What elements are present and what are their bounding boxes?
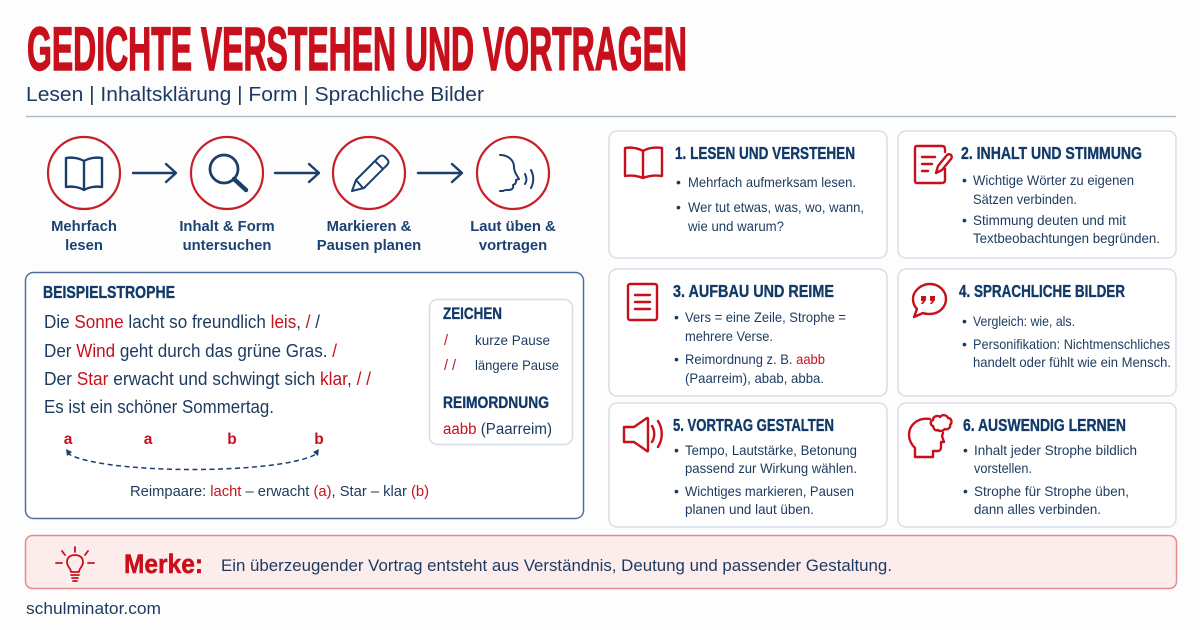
legend box: / [444,333,449,349]
panel: 6 Auswendig lernen: vorstellen. [974,460,1032,476]
panel: 3 Aufbau und Reime: 3. AUFBAU UND REIME [673,281,834,301]
panel: 5 Vortrag gestalten: Tempo, Lautstärke, Betonung [685,442,857,458]
rhyme letters: b [227,431,237,448]
step 3: mark and plan pauses [317,137,421,254]
panel: 4 Sprachliche Bilder: Vergleich: wie, als. [973,313,1075,329]
step 4: practise aloud [470,137,556,254]
panel: 4 Sprachliche Bilder: • [962,313,967,329]
panel: 3 Aufbau und Reime: (Paarreim), abab, abba. [685,370,824,386]
panel: 2 Inhalt und Stimmung: • [962,212,967,228]
panel: 2 Inhalt und Stimmung: • [962,172,967,188]
panel: 1 Lesen und Verstehen: wie und warum? [687,218,784,234]
step 4: practise aloud: vortragen [479,238,547,254]
legend box: / / [444,358,457,374]
legend box [430,300,572,444]
step 4: practise aloud: Laut üben & [470,219,556,235]
legend box: längere Pause [475,357,559,373]
rhyme letters [64,431,324,448]
panel: 2 Inhalt und Stimmung: Stimmung deuten und mit [973,212,1126,228]
panel: 5 Vortrag gestalten: passend zur Wirkung wählen. [685,460,857,476]
panel: 4 Sprachliche Bilder: handelt oder fühlt wie ein Mensch. [973,354,1171,370]
legend box: REIMORDNUNG [443,393,549,412]
panel: 6 Auswendig lernen: dann alles verbinden. [974,501,1101,517]
step 1: read repeatedly [48,137,120,254]
panel: 6 Auswendig lernen: • [963,442,968,458]
panel: 3 Aufbau und Reime: Reimordnung z. B. aabb [685,351,825,367]
panel: 5 Vortrag gestalten: 5. VORTRAG GESTALTEN [673,415,834,435]
panel: 1 Lesen und Verstehen: • [676,174,681,190]
panel: 5 Vortrag gestalten: • [674,483,679,499]
icon: document [628,284,657,320]
poem lines [44,312,371,417]
icon: speech bubble [913,284,946,317]
icon: speaker [624,418,662,451]
arrow 1 [133,164,176,182]
step 3: mark and plan pauses: Pausen planen [317,238,421,254]
icon: head with thought cloud [909,415,951,457]
panel: 3 Aufbau und Reime: • [674,351,679,367]
step 2: examine content and form [179,137,275,254]
panel: 3 Aufbau und Reime [609,269,887,396]
step 2: examine content and form: untersuchen [183,238,271,254]
panel: 2 Inhalt und Stimmung [898,131,1176,258]
step 3: mark and plan pauses: Markieren & [327,219,412,235]
panel: 5 Vortrag gestalten: Wichtiges markieren, Pausen [685,483,854,499]
panel: 3 Aufbau und Reime: • [674,309,679,325]
icon: book [625,148,662,178]
panel: 5 Vortrag gestalten: • [674,442,679,458]
poem lines: Der Wind geht durch das grüne Gras. / [44,341,337,361]
poem lines: Es ist ein schöner Sommertag. [44,397,274,417]
arrow 2 [275,164,319,182]
panel: 1 Lesen und Verstehen [609,131,887,258]
footer: schulminator.com [26,600,161,618]
rhyme pairs: Reimpaare: lacht – erwacht (a), Star – klar (b) [130,483,429,500]
dashed rhyme arc [66,449,319,470]
process flow [48,137,556,254]
panel: 4 Sprachliche Bilder: Personifikation: Nichtmenschliches [973,336,1170,352]
arrow 3 [418,164,462,182]
panel: 6 Auswendig lernen: Strophe für Strophe üben, [974,483,1129,499]
subtitle: Lesen | Inhaltsklärung | Form | Sprachliche Bilder [26,83,484,106]
legend box: kurze Pause [475,332,550,348]
legend box: aabb (Paarreim) [443,421,552,438]
panel: 3 Aufbau und Reime: Vers = eine Zeile, Strophe = [685,309,846,325]
rhyme letters: a [144,431,153,448]
panel: 1 Lesen und Verstehen: Mehrfach aufmerksam lesen. [688,174,856,190]
poem lines: Die Sonne lacht so freundlich leis, / / [44,312,320,332]
callout: Merke: Merke: [124,549,203,579]
panel: 2 Inhalt und Stimmung: Textbeobachtungen begründen. [973,230,1160,246]
panel: 6 Auswendig lernen: 6. AUSWENDIG LERNEN [963,415,1126,435]
panel: 6 Auswendig lernen: Inhalt jeder Strophe bildlich [974,442,1137,458]
heading: BEISPIELSTROPHE [43,282,175,302]
panel: 1 Lesen und Verstehen: 1. LESEN UND VERSTEHEN [675,143,855,163]
legend box: ZEICHEN [443,304,502,323]
panel: 4 Sprachliche Bilder [898,269,1176,396]
panel: 2 Inhalt und Stimmung: Wichtige Wörter zu eigenen [973,172,1134,188]
step 1: read repeatedly: Mehrfach [51,219,117,235]
panel: 4 Sprachliche Bilder: 4. SPRACHLICHE BILDER [959,281,1125,301]
panel: 6 Auswendig lernen [898,403,1176,527]
panel: example stanza [26,272,584,518]
panel: 2 Inhalt und Stimmung: 2. INHALT UND STIMMUNG [961,143,1142,163]
poem lines: Der Star erwacht und schwingt sich klar, / / [44,369,371,389]
panel: 5 Vortrag gestalten [609,403,887,527]
panel: 3 Aufbau und Reime: mehrere Verse. [685,328,773,344]
panel: 6 Auswendig lernen: • [963,483,968,499]
callout: Merke [26,536,1176,588]
panel: 1 Lesen und Verstehen: Wer tut etwas, was, wo, wann, [688,199,864,215]
panel: 1 Lesen und Verstehen: • [676,199,681,215]
panel: 2 Inhalt und Stimmung: Sätzen verbinden. [973,191,1077,207]
panel: 5 Vortrag gestalten: planen und laut üben. [685,501,814,517]
panel: 4 Sprachliche Bilder: • [962,336,967,352]
callout: Merke: Ein überzeugender Vortrag entsteht aus Verständnis, Deutung und passender Gestaltung. [221,557,892,575]
rhyme letters: a [64,431,73,448]
step 2: examine content and form: Inhalt & Form [179,219,275,235]
step 1: read repeatedly: lesen [65,238,103,254]
icon: notepad with pen [915,146,952,183]
icon: light bulb [56,547,94,581]
rhyme letters: b [314,431,324,448]
